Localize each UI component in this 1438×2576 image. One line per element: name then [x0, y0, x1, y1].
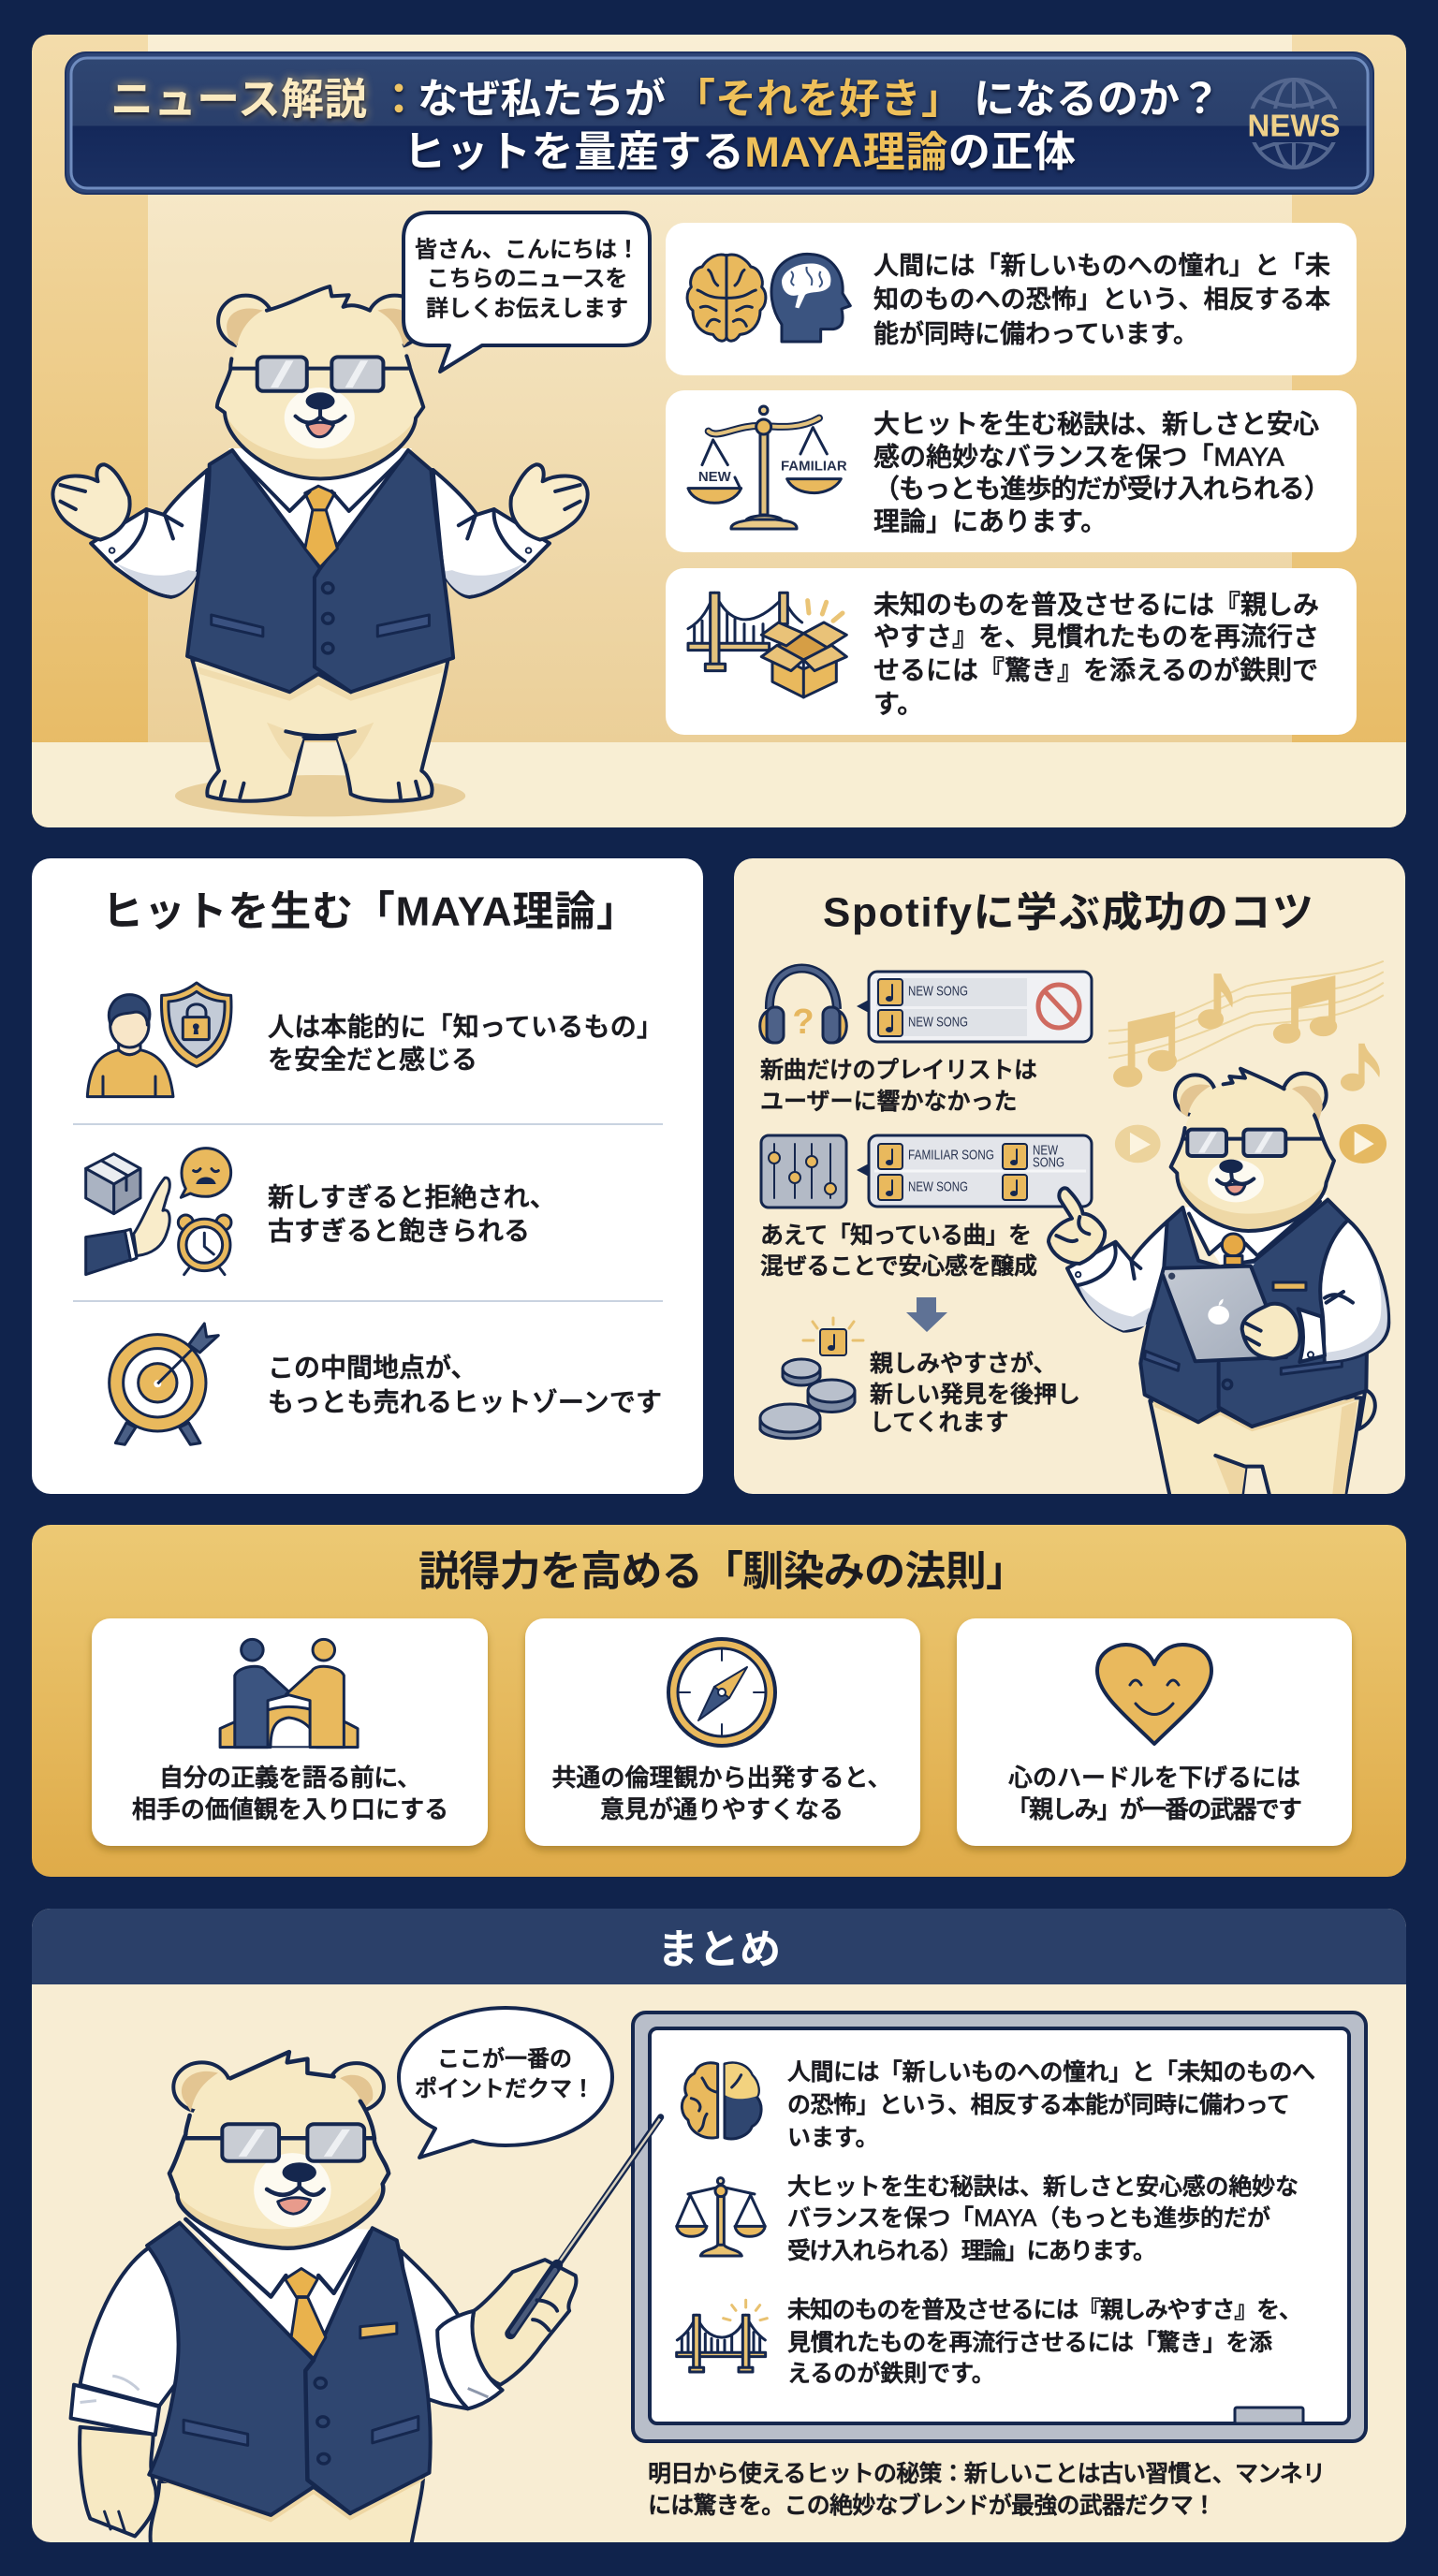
mascot bear: presenting — [52, 286, 588, 816]
card: balance: 理論」にあります。 — [873, 507, 1107, 535]
text: familiarity: してくれます — [870, 1410, 1009, 1436]
title text: になるのか？ — [974, 77, 1221, 122]
title text: ヒットを量産するMAYA理論の正体 — [404, 127, 1076, 176]
icon: person and shield — [87, 983, 231, 1097]
card: familiarity weapon: 「親しみ」が一番の武器です — [1006, 1795, 1302, 1823]
summary item: balance — [677, 2174, 1299, 2264]
icon: bridge — [677, 2300, 767, 2372]
card: balance — [666, 390, 1357, 552]
panel: Spotify success tips — [734, 858, 1405, 1498]
left arm — [80, 2427, 156, 2537]
icon: split brain — [682, 2063, 761, 2139]
song rows: FAMILIAR SONG — [908, 1148, 994, 1163]
vest — [183, 2219, 373, 2360]
title text — [110, 75, 1221, 176]
card: balance: 大ヒットを生む秘訣は、新しさと安心 — [873, 410, 1319, 438]
song rows: NEW SONG — [908, 1015, 968, 1030]
card: bridge and surprise: す。 — [873, 689, 923, 719]
summary item: bridge: 未知のものを普及させるには『親しみやすさ』を、 — [787, 2297, 1302, 2323]
card: bridge and surprise — [666, 568, 1357, 735]
panel: MAYA theory: ヒットを生む「MAYA理論」 — [102, 889, 638, 934]
card: bridge and surprise: 未知のものを普及させるには『親しみ — [873, 590, 1319, 620]
icon: bridge and open box — [688, 593, 846, 697]
header: summary: まとめ — [657, 1926, 781, 1973]
icon: note and coins — [760, 1318, 863, 1439]
whiteboard — [633, 2012, 1366, 2441]
row: hit zone: この中間地点が、 — [268, 1354, 477, 1382]
row: safety — [87, 983, 663, 1097]
card: instincts: 人間には「新しいものへの憧れ」と「未 — [873, 252, 1330, 280]
song rows: NEW SONG — [908, 983, 968, 1000]
summary item: bridge: えるのが鉄則です。 — [787, 2361, 995, 2387]
playlist: new songs only — [760, 968, 1092, 1043]
title text: ニュース解説 — [110, 75, 367, 124]
title text: ： — [377, 75, 420, 124]
panel: summary — [32, 1909, 1406, 2546]
title text: ニュース解説 — [110, 75, 367, 124]
summary item: instincts: います。 — [787, 2125, 879, 2151]
header: summary — [32, 1909, 1406, 1984]
card: instincts: 知のものへの恐怖」という、相反する本 — [873, 285, 1330, 314]
card: ethics — [525, 1618, 920, 1846]
panel: MAYA theory — [32, 858, 703, 1494]
pointer — [510, 2117, 661, 2334]
panel: Spotify success tips: Spotifyに学ぶ成功のコツ — [823, 889, 1313, 936]
card: values — [92, 1618, 488, 1846]
card: familiarity weapon: 心のハードルを下げるには — [1008, 1764, 1300, 1792]
speech bubble: greeting — [404, 212, 650, 372]
card: bridge and surprise: せるには『驚き』を添えるのが鉄則で — [873, 655, 1318, 685]
head — [218, 296, 273, 347]
text: mixed: あえて「知っている曲」を — [760, 1222, 1032, 1249]
summary item: instincts: の恐怖」という、相反する本能が同時に備わって — [787, 2092, 1290, 2118]
head — [173, 2062, 230, 2112]
row: safety: を安全だと感じる — [268, 1045, 477, 1075]
closing message: 明日から使えるヒットの秘策：新しいことは古い習慣と、マンネリ — [648, 2461, 1326, 2487]
card: balance: （もっとも進歩的だが受け入れられる） — [873, 474, 1330, 504]
mascot bear: with tablet — [1067, 1069, 1388, 1498]
summary item: balance: 大ヒットを生む秘訣は、新しさと安心感の絶妙な — [787, 2174, 1299, 2200]
card: values: 自分の正義を語る前に、 — [159, 1764, 421, 1792]
icon: smiling heart — [1097, 1645, 1211, 1744]
arrow: down — [906, 1297, 947, 1332]
card: familiarity weapon — [957, 1618, 1352, 1846]
card: values: 相手の価値観を入り口にする — [132, 1795, 448, 1823]
icon: target — [110, 1324, 218, 1444]
icon: news globe: NEWS — [1247, 109, 1341, 142]
icons: brain and head — [687, 254, 850, 342]
text: familiarity — [870, 1351, 1080, 1436]
row: hit zone — [110, 1324, 662, 1444]
icon: headphones: ? — [792, 1003, 814, 1042]
mascot bear: pointing with stick — [71, 2052, 661, 2546]
card: balance: 感の絶妙なバランスを保つ「MAYA — [873, 442, 1284, 472]
song rows: SONG — [1033, 1155, 1064, 1170]
row: too new too old: 新しすぎると拒絶され、 — [268, 1183, 556, 1211]
card: instincts: 能が同時に備わっています。 — [873, 320, 1198, 348]
card: instincts — [666, 223, 1357, 375]
row: too new too old — [86, 1149, 556, 1275]
row: safety: 人は本能的に「知っているもの」 — [268, 1013, 663, 1041]
title text: なぜ私たちが — [418, 77, 666, 122]
speech bubble: greeting: 詳しくお伝えします — [426, 296, 628, 322]
summary item: balance: 受け入れられる）理論」にあります。 — [787, 2238, 1156, 2264]
icon: scales — [677, 2178, 765, 2256]
shirt and vest — [228, 448, 412, 545]
icon: mixer — [761, 1135, 846, 1208]
icon: box, hand, sad face and clock — [86, 1149, 231, 1275]
pointing hand is drawn over the playlist below — [1175, 1075, 1215, 1116]
text: new only: ユーザーに響かなかった — [760, 1089, 1018, 1115]
icon: news globe — [1247, 80, 1341, 168]
icon: handshake on bridge — [220, 1639, 358, 1748]
row: too new too old: 古すぎると飽きられる — [268, 1217, 530, 1245]
icon: compass — [668, 1639, 775, 1746]
summary item: bridge — [677, 2297, 1302, 2387]
card: ethics: 意見が通りやすくなる — [600, 1795, 844, 1823]
title banner — [66, 52, 1373, 194]
song rows: NEW — [1033, 1142, 1059, 1159]
panel: law of familiarity — [32, 1525, 1406, 1877]
text: new only: 新曲だけのプレイリストは — [760, 1058, 1037, 1084]
song rows — [878, 1142, 1064, 1200]
row: hit zone: もっとも売れるヒットゾーンです — [268, 1387, 662, 1417]
closing message — [648, 2461, 1326, 2519]
icon: scales new vs familiar: FAMILIAR — [781, 460, 847, 475]
summary item: balance: バランスを保つ「MAYA（もっとも進歩的だが — [787, 2205, 1270, 2232]
summary item: instincts: 人間には「新しいものへの憧れ」と「未知のものへ — [787, 2059, 1315, 2086]
arms — [52, 464, 208, 597]
icon: headphones — [760, 968, 846, 1043]
playlist: mixed songs — [761, 1135, 1092, 1208]
speech bubble: key point — [399, 2008, 612, 2158]
song rows — [878, 979, 968, 1036]
speech bubble: greeting: 皆さん、こんにちは！ — [415, 238, 639, 262]
song rows: NEW SONG — [908, 1179, 968, 1194]
text: new only — [760, 1058, 1037, 1115]
icon: scales new vs familiar: NEW — [698, 469, 732, 485]
panel: law of familiarity: 説得力を高める「馴染みの法則」 — [418, 1548, 1027, 1595]
text: mixed — [760, 1222, 1037, 1280]
pointing hand — [1049, 1188, 1105, 1264]
title text: 「それを好き」 — [674, 77, 962, 122]
icon: prohibited — [1038, 985, 1079, 1028]
summary item: bridge: 見慣れたものを再流行させるには「驚き」を添 — [787, 2330, 1272, 2356]
right arm — [401, 2251, 468, 2408]
summary item: instincts — [682, 2059, 1315, 2151]
icon: scales new vs familiar — [688, 406, 847, 529]
speech bubble: greeting: こちらのニュースを — [427, 266, 627, 292]
card: ethics: 共通の倫理観から出発すると、 — [552, 1764, 891, 1792]
text: mixed: 混ぜることで安心感を醸成 — [760, 1253, 1037, 1280]
text: familiarity: 新しい発見を後押し — [870, 1382, 1080, 1408]
card: bridge and surprise: やすさ』を、見慣れたものを再流行さ — [873, 622, 1319, 651]
speech bubble: key point: ポイントだクマ！ — [415, 2076, 594, 2102]
decoration: music notes and play buttons — [1108, 961, 1387, 1164]
speech bubble: key point: ここが一番の — [437, 2046, 572, 2072]
text: familiarity: 親しみやすさが、 — [870, 1351, 1057, 1377]
panel: intro news — [32, 35, 1406, 827]
closing message: には驚きを。この絶妙なブレンドが最強の武器だクマ！ — [648, 2493, 1216, 2519]
